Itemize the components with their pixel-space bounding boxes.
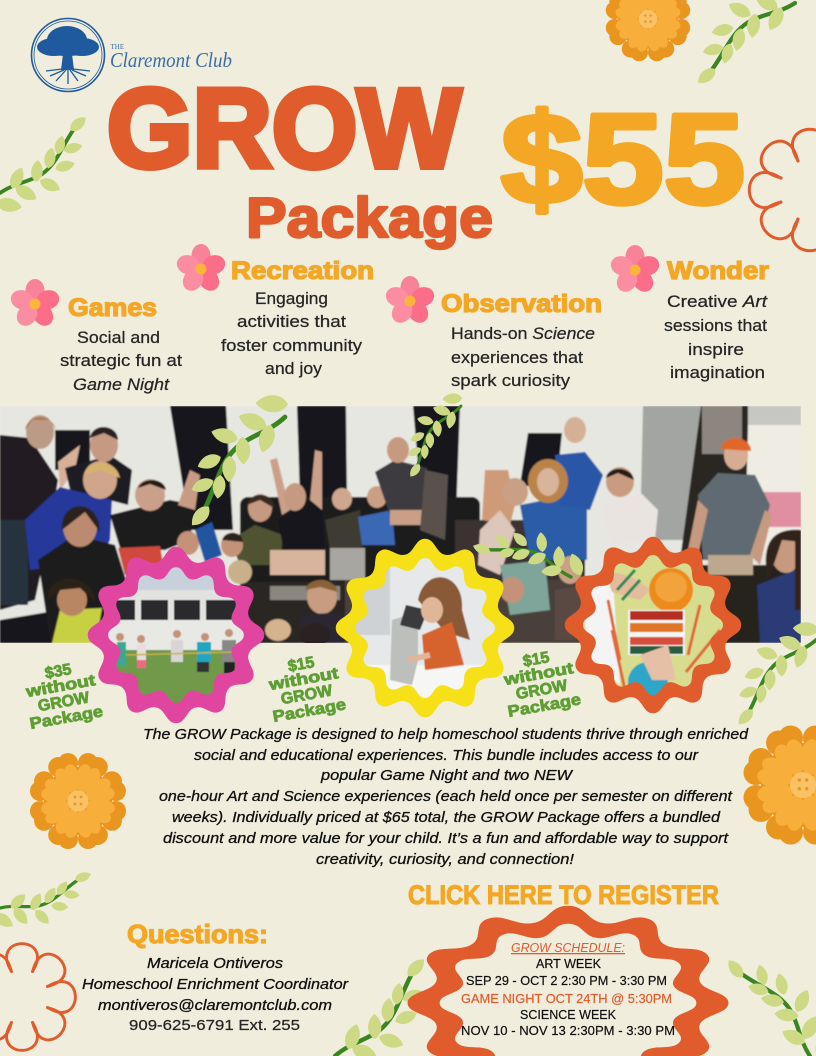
kids center <box>230 525 283 565</box>
column: Recreation: and joy <box>265 359 323 378</box>
column: Recreation: activities that <box>237 312 346 331</box>
column: Observation: Hands-on Science <box>451 324 595 343</box>
contact details: Maricela Ontiveros <box>147 955 284 972</box>
title: Package: Package <box>246 186 493 250</box>
icon: orange flower right <box>743 725 816 845</box>
icon: vine bottom right <box>723 957 816 1056</box>
price tag: $15 without GROW Package, art: $15 <box>522 649 551 671</box>
price tag: $15 without GROW Package, science: $15 <box>287 654 316 676</box>
column: Observation: Observation <box>441 290 602 318</box>
column: Observation <box>383 276 602 390</box>
icon: orange flower top <box>606 0 690 61</box>
schedule text: SEP 29 - OCT 2 2:30 PM - 3:30 PM <box>466 973 667 988</box>
price tag: $15 without GROW Package, art: GROW <box>515 677 570 703</box>
price tag: $35 without GROW Package: GROW <box>37 689 92 715</box>
column: Observation: spark curiosity <box>451 371 571 390</box>
price tag: $35 without GROW Package <box>20 657 104 733</box>
column: Games: Social and <box>77 328 160 347</box>
boy orange cap <box>698 473 770 560</box>
badge: pink, game night <box>88 547 264 723</box>
boy yellow <box>52 608 102 643</box>
icon: vine on photo left <box>171 390 305 531</box>
price tag: $15 without GROW Package, science: without <box>267 665 341 694</box>
girl right <box>757 570 801 643</box>
text block: description: creativity, curiosity, and connection! <box>316 851 575 868</box>
person 3 <box>25 487 112 570</box>
column: Recreation <box>174 244 374 378</box>
contact details: Homeschool Enrichment Coordinator <box>82 976 349 993</box>
logo: The Claremont Club: THE <box>110 43 124 51</box>
icon: orange flower left <box>30 753 126 849</box>
column: Games: strategic fun at <box>60 351 182 370</box>
icon: outline flower right <box>749 129 816 251</box>
column: Games: Game Night <box>73 375 170 394</box>
panel: schedule badge <box>408 906 728 1056</box>
icon: vine on photo right <box>468 499 589 618</box>
column: Games <box>8 279 182 394</box>
right kids <box>482 470 515 525</box>
column: Wonder: Creative Art <box>667 292 768 311</box>
schedule text: NOV 10 - NOV 13 2:30PM - 3:30 PM <box>461 1023 675 1038</box>
icon: vine bottom centre <box>320 954 439 1056</box>
text block: description: one-hour Art and Science experiences (each held once per semester on different <box>159 788 733 805</box>
contact details <box>82 955 349 1034</box>
price: $55: $55 <box>501 88 745 231</box>
schedule text <box>461 940 675 1038</box>
schedule text: SCIENCE WEEK <box>520 1007 616 1022</box>
price tag: $35 without GROW Package: Package <box>29 703 104 733</box>
badge: orange, art <box>565 537 741 713</box>
column: Wonder: inspire <box>688 340 744 359</box>
girl blue <box>177 531 199 555</box>
icon: vine left top <box>0 114 89 214</box>
person 2 <box>65 455 132 505</box>
icon: vine right top <box>694 0 801 91</box>
column: Wonder <box>608 245 769 382</box>
price tag: $15 without GROW Package, art <box>498 645 582 721</box>
icon: outline flower lower left <box>0 944 75 1050</box>
text block: description: The GROW Package is designed to help homeschool students thrive through enriched <box>143 726 749 743</box>
icon: vine on photo centre <box>391 390 478 480</box>
price tag: $15 without GROW Package, art: without <box>502 660 576 689</box>
price tag: $15 without GROW Package, art: Package <box>507 691 582 721</box>
person 4 <box>38 535 126 640</box>
text block: description: social and educational experiences. This bundle includes access to our <box>194 747 699 764</box>
price tag: $15 without GROW Package, science <box>263 650 347 726</box>
text block: description: discount and more value for your child. It’s a fun and affordable way to support <box>163 830 729 847</box>
price tag: $35 without GROW Package: $35 <box>44 661 73 683</box>
logo: The Claremont Club: Claremont Club <box>110 48 232 72</box>
schedule text: GAME NIGHT OCT 24TH @ 5:30PM <box>461 991 672 1006</box>
icon: vine lower left <box>0 843 95 952</box>
badge: yellow, science <box>336 539 514 717</box>
text block: description <box>143 726 749 868</box>
group photo <box>0 406 801 647</box>
column: Recreation: Engaging <box>255 289 328 308</box>
column: Recreation: foster community <box>221 336 363 355</box>
boy black shirt <box>110 500 195 550</box>
title: GROW: GROW <box>107 66 461 191</box>
column: Wonder: imagination <box>670 363 765 382</box>
text block: description: weeks). Individually priced at $65 total, the GROW Package offers a bundled <box>172 809 721 826</box>
column: Recreation: Recreation <box>231 257 374 285</box>
column: Wonder: Wonder <box>667 257 769 285</box>
contact details: montiveros@claremontclub.com <box>98 997 332 1014</box>
schedule text: ART WEEK <box>536 956 601 971</box>
logo: The Claremont Club <box>32 18 232 92</box>
column: Observation: experiences that <box>451 348 583 367</box>
column: Games: Games <box>68 294 157 322</box>
icon: vine right middle <box>725 619 816 728</box>
price tag: $15 without GROW Package, science: Package <box>272 696 347 726</box>
person 1 <box>0 435 58 610</box>
heading: Questions: Questions: <box>127 919 268 949</box>
schedule text: GROW SCHEDULE: <box>511 940 625 955</box>
price tag: $15 without GROW Package, science: GROW <box>280 682 335 708</box>
column: Wonder: sessions that <box>664 316 767 335</box>
text block: description: popular Game Night and two NEW <box>320 767 574 784</box>
price tag: $35 without GROW Package: without <box>24 672 98 701</box>
contact details: 909-625-6791 Ext. 255 <box>129 1017 300 1034</box>
link: click here to register: CLICK HERE TO REGISTER <box>408 880 719 910</box>
boy top centre <box>375 460 428 515</box>
